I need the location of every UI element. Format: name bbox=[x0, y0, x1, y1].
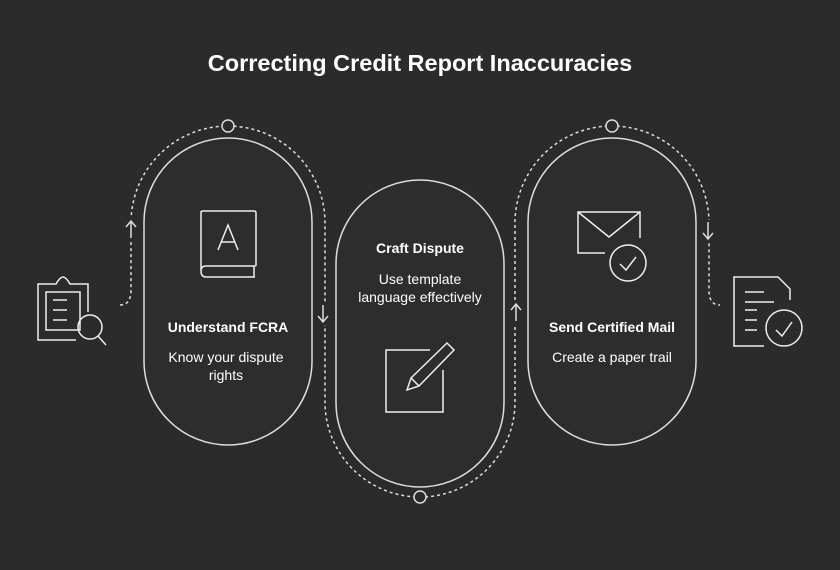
panel: craft dispute bbox=[336, 180, 504, 487]
icon: pencil bbox=[386, 343, 454, 412]
arrows bbox=[126, 218, 713, 325]
connector circles bbox=[222, 120, 618, 503]
icon: clipboard search bbox=[38, 277, 106, 345]
panel: understand FCRA bbox=[144, 138, 312, 445]
title: Correcting Credit Report Inaccuracies bbox=[208, 50, 632, 76]
panel: craft dispute: Use template bbox=[379, 271, 461, 287]
icon: book bbox=[201, 211, 256, 277]
text: send mail: Send Certified Mail bbox=[549, 319, 675, 335]
panel: send certified mail bbox=[528, 138, 696, 445]
text: craft dispute: Craft Dispute bbox=[376, 240, 464, 256]
text: understand FCRA: Understand FCRA bbox=[168, 319, 288, 335]
icon: envelope check bbox=[578, 212, 646, 281]
panel: craft dispute: language effectively bbox=[358, 289, 482, 305]
dashed flow path bbox=[120, 126, 720, 497]
panel: understand FCRA: rights bbox=[209, 367, 243, 383]
panel: understand FCRA: Know your dispute bbox=[168, 349, 284, 365]
icon: document check bbox=[734, 277, 802, 346]
panel: send certified mail: Create a paper trail bbox=[552, 349, 672, 365]
